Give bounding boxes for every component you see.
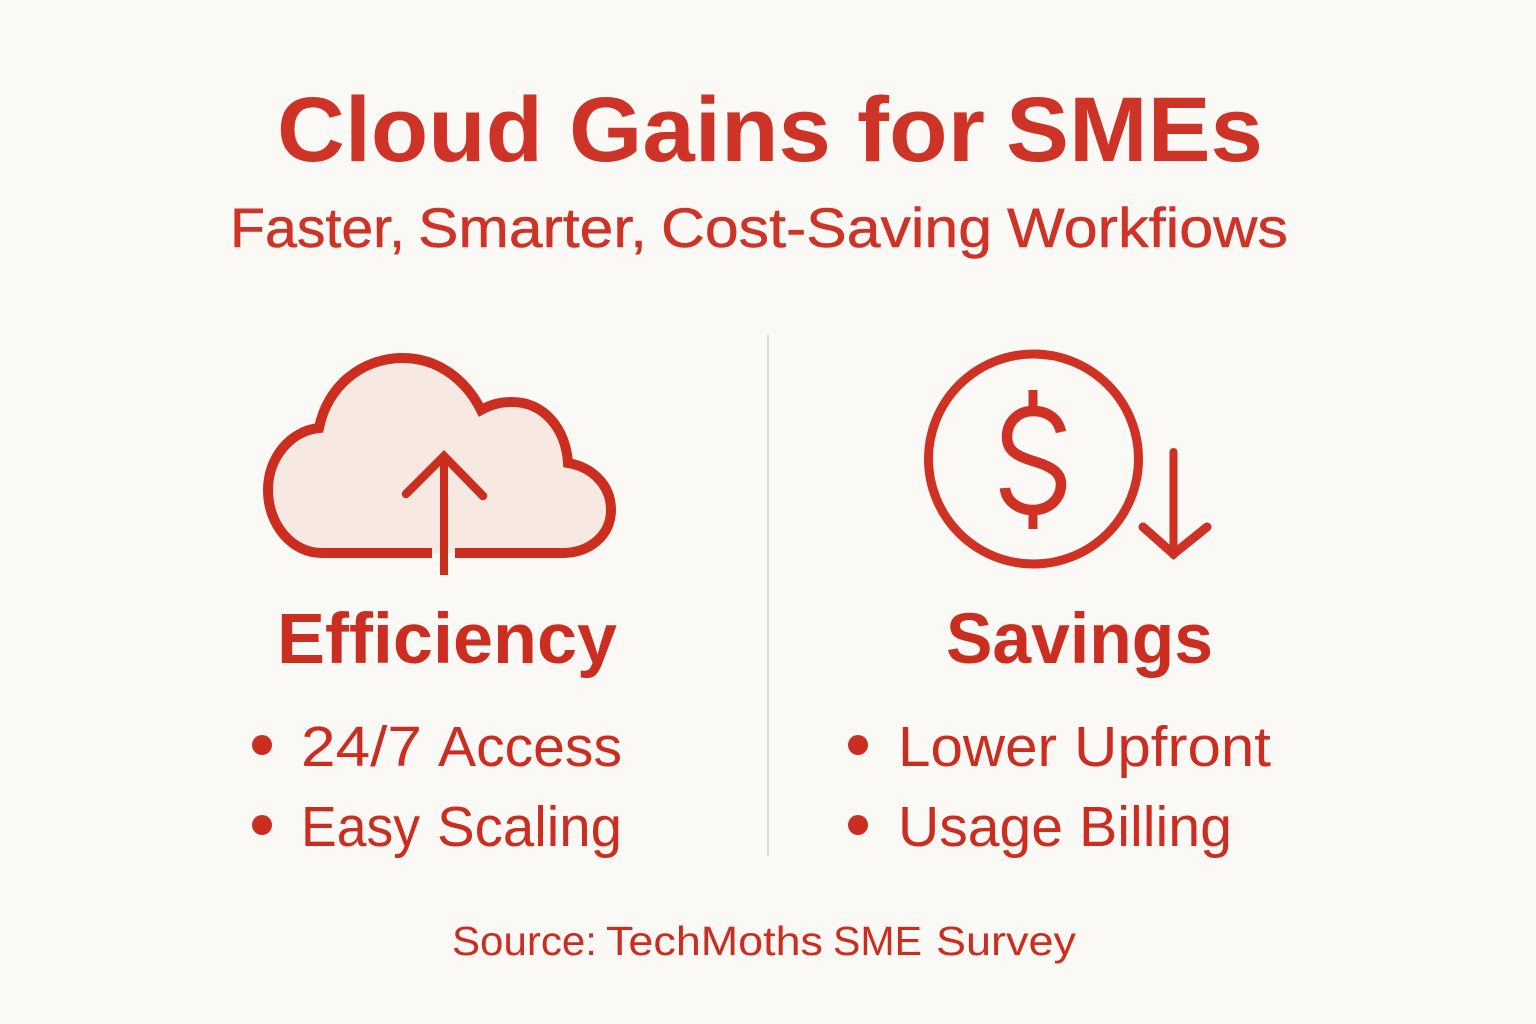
subtitle: Cost-Saving: [661, 196, 992, 259]
source note: Survey: [936, 918, 1077, 964]
bullet: easy scaling: [252, 795, 622, 859]
source note: SME: [833, 918, 922, 964]
bullet: 24/7 access: [252, 715, 622, 779]
bullet: lower upfront: Lower: [898, 715, 1057, 779]
subtitle: Workfiows: [1007, 196, 1288, 259]
bullet: easy scaling: Scaling: [437, 795, 622, 859]
icon: dollar coin with downward arrow: [928, 354, 1207, 564]
source note: [452, 918, 1077, 964]
title: for: [857, 79, 985, 181]
list: savings points: [848, 715, 1271, 859]
subtitle: [230, 196, 1288, 259]
bullet: usage billing: Billing: [1079, 795, 1232, 859]
bullet: usage billing: Usage: [898, 795, 1063, 859]
title: SMEs: [1006, 79, 1263, 181]
list: efficiency points: [252, 715, 622, 859]
bullet: lower upfront: [848, 715, 1271, 779]
bullet: usage billing: [848, 795, 1232, 859]
source note: TechMoths: [606, 918, 823, 964]
source note: Source:: [452, 918, 597, 964]
bullet: 24/7 access: Access: [438, 715, 622, 779]
panel: efficiency: [252, 358, 622, 859]
title: Gains: [569, 79, 831, 181]
subtitle: Smarter,: [418, 196, 647, 259]
heading: efficiency: Efficiency: [277, 600, 618, 679]
bullet: easy scaling: Easy: [301, 795, 420, 859]
subtitle: Faster,: [230, 196, 405, 259]
bullet: 24/7 access: 24/7: [301, 715, 422, 779]
title: Cloud: [277, 79, 543, 181]
icon: cloud with upward arrow: [268, 358, 611, 575]
heading: savings: Savings: [946, 600, 1213, 679]
title: [277, 79, 1263, 181]
bullet: lower upfront: Upfront: [1074, 715, 1271, 779]
panel: savings: [848, 354, 1271, 859]
